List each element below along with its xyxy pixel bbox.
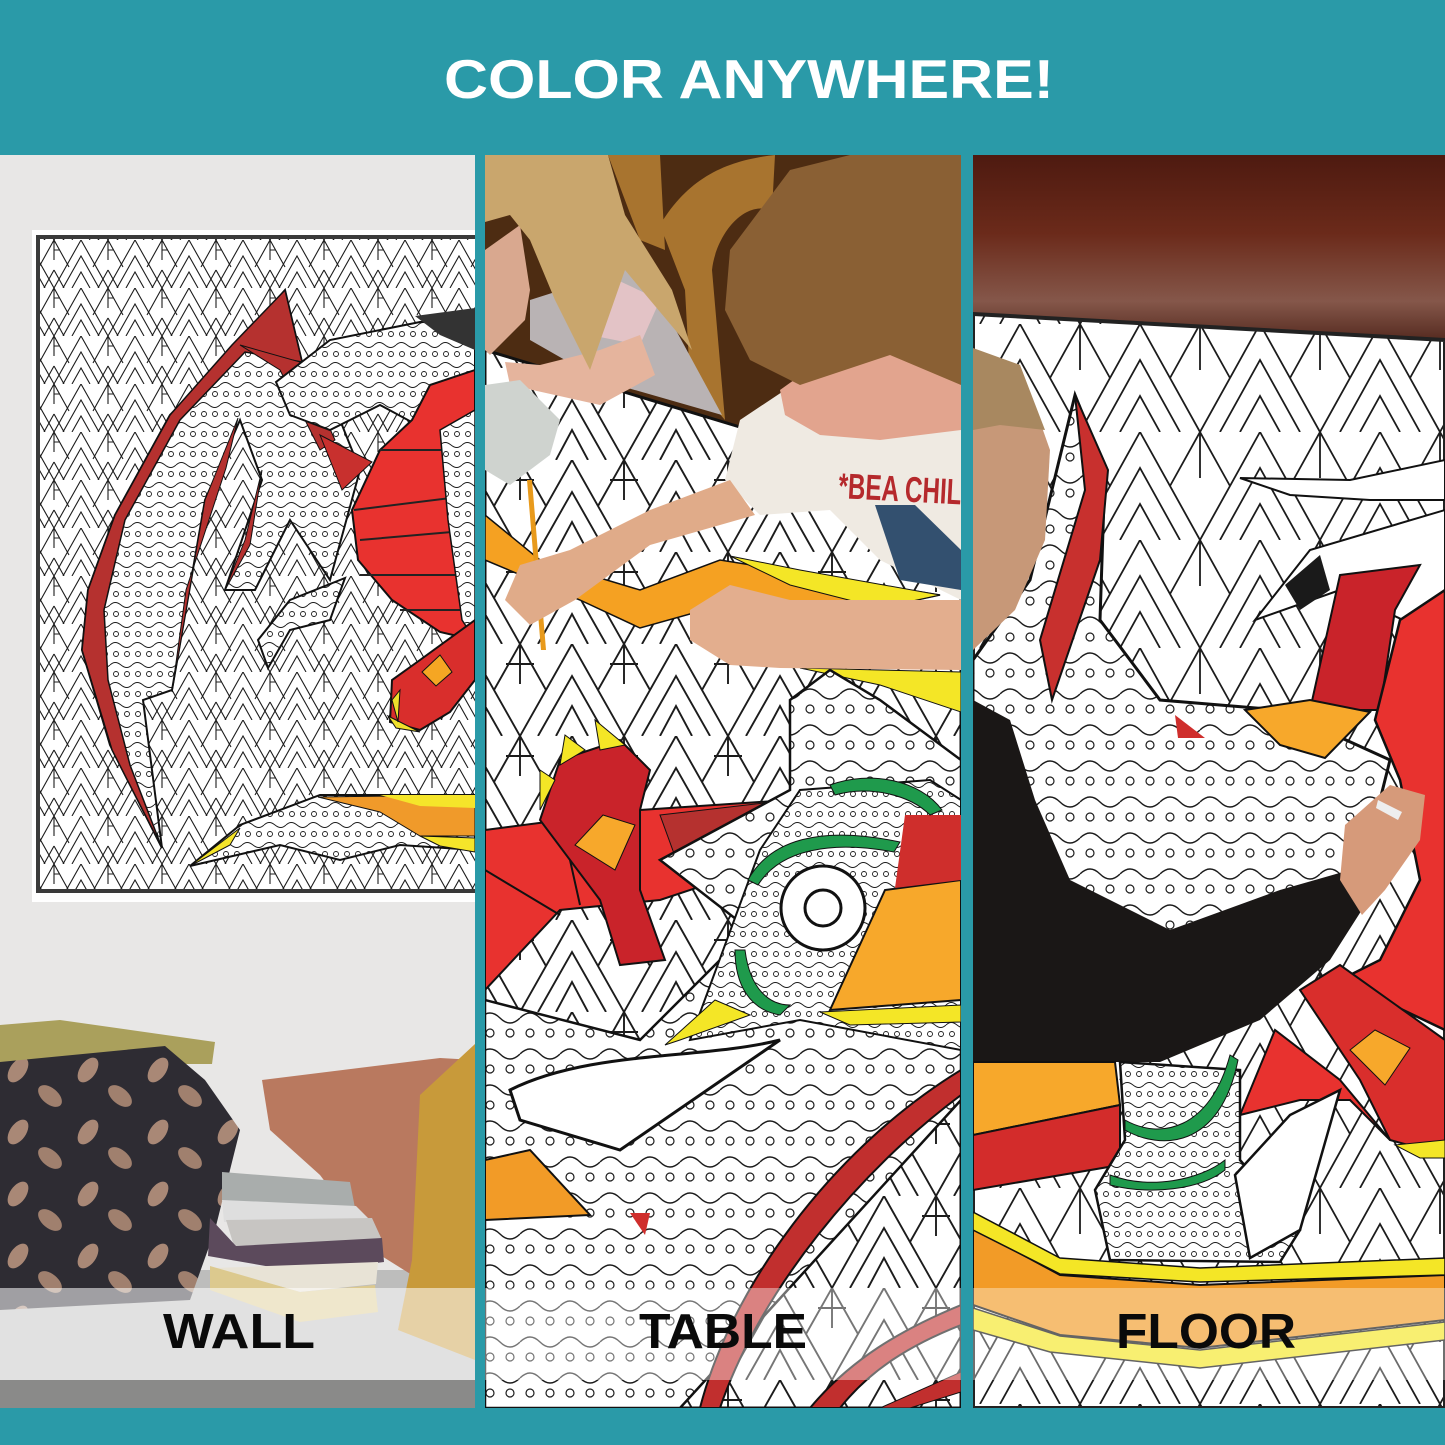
boy: *BEA CHIL [838, 465, 963, 512]
label: floor: FLOOR [1116, 1305, 1296, 1359]
girl [485, 155, 722, 415]
dragon wing on floor [973, 390, 1391, 930]
dragon body doodles on table [485, 670, 961, 1408]
orange scale [1245, 700, 1370, 758]
red body [1352, 589, 1445, 1032]
table poster [485, 350, 961, 1408]
red neck [1310, 565, 1420, 710]
lower wing red and orange [973, 1062, 1120, 1190]
dragon head horns [1240, 460, 1445, 640]
dragon claw [388, 620, 475, 732]
panel: floor [973, 155, 1445, 1408]
stack of books [208, 1172, 384, 1322]
claw and wing bits [1240, 965, 1445, 1158]
floor poster [973, 314, 1445, 1408]
basket with leaf print [0, 1020, 240, 1310]
bottom band [0, 1408, 1445, 1445]
wood floor [973, 155, 1445, 350]
pencil [527, 480, 546, 650]
panel: wall [0, 155, 483, 1408]
yellow chair [398, 1044, 475, 1360]
label: table: TABLE [639, 1305, 807, 1359]
dragon tail strip [973, 1212, 1445, 1368]
label band: table [485, 1288, 961, 1380]
wall poster [32, 230, 483, 902]
hand with crayon [1340, 785, 1425, 915]
top banner [0, 0, 1445, 155]
dragon tail [190, 795, 475, 866]
black sleeve [973, 700, 1365, 1062]
boy [505, 155, 963, 670]
wing detail with red veins [485, 1040, 961, 1408]
label band: wall [0, 1288, 475, 1380]
red claw and leg [540, 720, 665, 965]
leg doodles with green bands [1095, 1055, 1340, 1262]
red dragon wing on table [485, 800, 790, 990]
floor rug [0, 1270, 475, 1408]
label: wall: WALL [163, 1305, 315, 1359]
dragon wing [82, 290, 372, 848]
head of adult [973, 350, 1050, 650]
orange-yellow scale strip [485, 515, 961, 712]
dragon head [276, 308, 475, 432]
crayon box [485, 380, 560, 485]
wooden chairs background [485, 155, 850, 426]
label band: floor [973, 1288, 1445, 1380]
pillow [262, 1058, 475, 1275]
white foreleg claw [258, 578, 345, 668]
title: COLOR ANYWHERE! [444, 48, 1054, 110]
dragon red body [352, 370, 475, 640]
panel: table [485, 155, 963, 1408]
